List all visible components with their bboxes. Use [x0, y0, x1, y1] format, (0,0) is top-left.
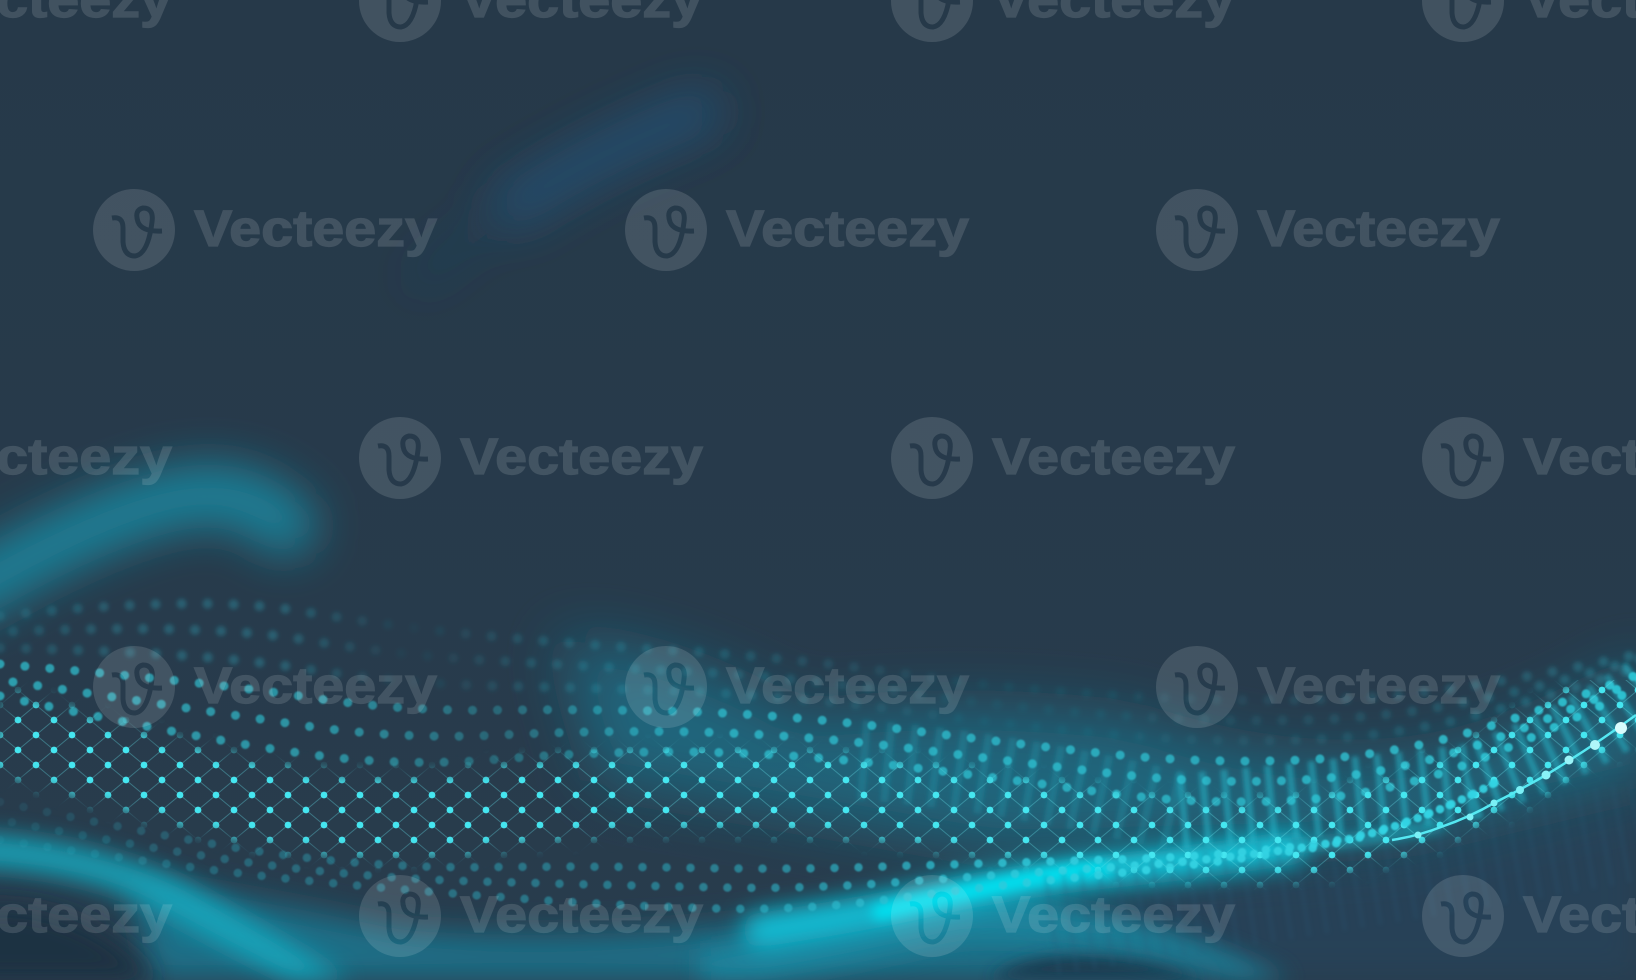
watermark row 3	[891, 417, 1236, 499]
watermark row 4: Vecteezy	[726, 657, 970, 714]
streaked fan above right of band	[860, 692, 1636, 812]
mesh: sharp lattice with nodes	[0, 680, 1636, 890]
dark dome at bottom	[990, 954, 1200, 980]
teal tail under bright band	[700, 900, 1290, 980]
watermark row 3	[1422, 417, 1636, 499]
bright front edge line with nodes, right	[1392, 715, 1636, 840]
blurred blue streak, top	[420, 112, 700, 278]
lower-left cyan glow	[0, 833, 350, 980]
blue haze, lower right	[1000, 800, 1636, 980]
bright cyan band: core	[880, 825, 1440, 912]
watermark row 3: Vecteezy	[460, 428, 704, 485]
watermark row 2: Vecteezy	[1257, 200, 1501, 257]
wide teal glow along bottom	[130, 880, 1240, 980]
watermark row 4: Vecteezy	[1257, 657, 1501, 714]
watermark row 5: Vecteezy	[992, 886, 1236, 943]
watermark row 1	[359, 0, 704, 42]
watermark row 2	[93, 189, 438, 271]
streaks below band, right	[1050, 830, 1636, 925]
watermark row 1	[1422, 0, 1636, 42]
watermark row 2	[625, 189, 970, 271]
watermark row 5	[891, 875, 1236, 957]
bright cyan band: soft glow	[760, 848, 1290, 930]
mesh: near dot rows (blurred)	[0, 780, 1500, 909]
watermark row 4: Vecteezy	[194, 657, 438, 714]
watermark row 2: Vecteezy	[194, 200, 438, 257]
watermark row 4	[93, 646, 438, 728]
watermark row 1	[891, 0, 1236, 42]
watermark row 3: Vecteezy	[992, 428, 1236, 485]
watermark row 5: Vecteezy	[460, 886, 704, 943]
mesh: far dot rows (blurred)	[0, 604, 1636, 741]
watermark row 2: Vecteezy	[726, 200, 970, 257]
watermark row 2	[1156, 189, 1501, 271]
watermark row 4	[1156, 646, 1501, 728]
watermark row 3	[359, 417, 704, 499]
teal haze behind mesh	[560, 640, 1636, 850]
teal glow ridge, upper left	[0, 495, 285, 590]
watermark row 4	[625, 646, 970, 728]
watermark row 5	[1422, 875, 1636, 957]
watermark row 5	[359, 875, 704, 957]
lower-left dark blob	[0, 906, 155, 980]
mesh: middle dot rows	[0, 650, 1636, 802]
